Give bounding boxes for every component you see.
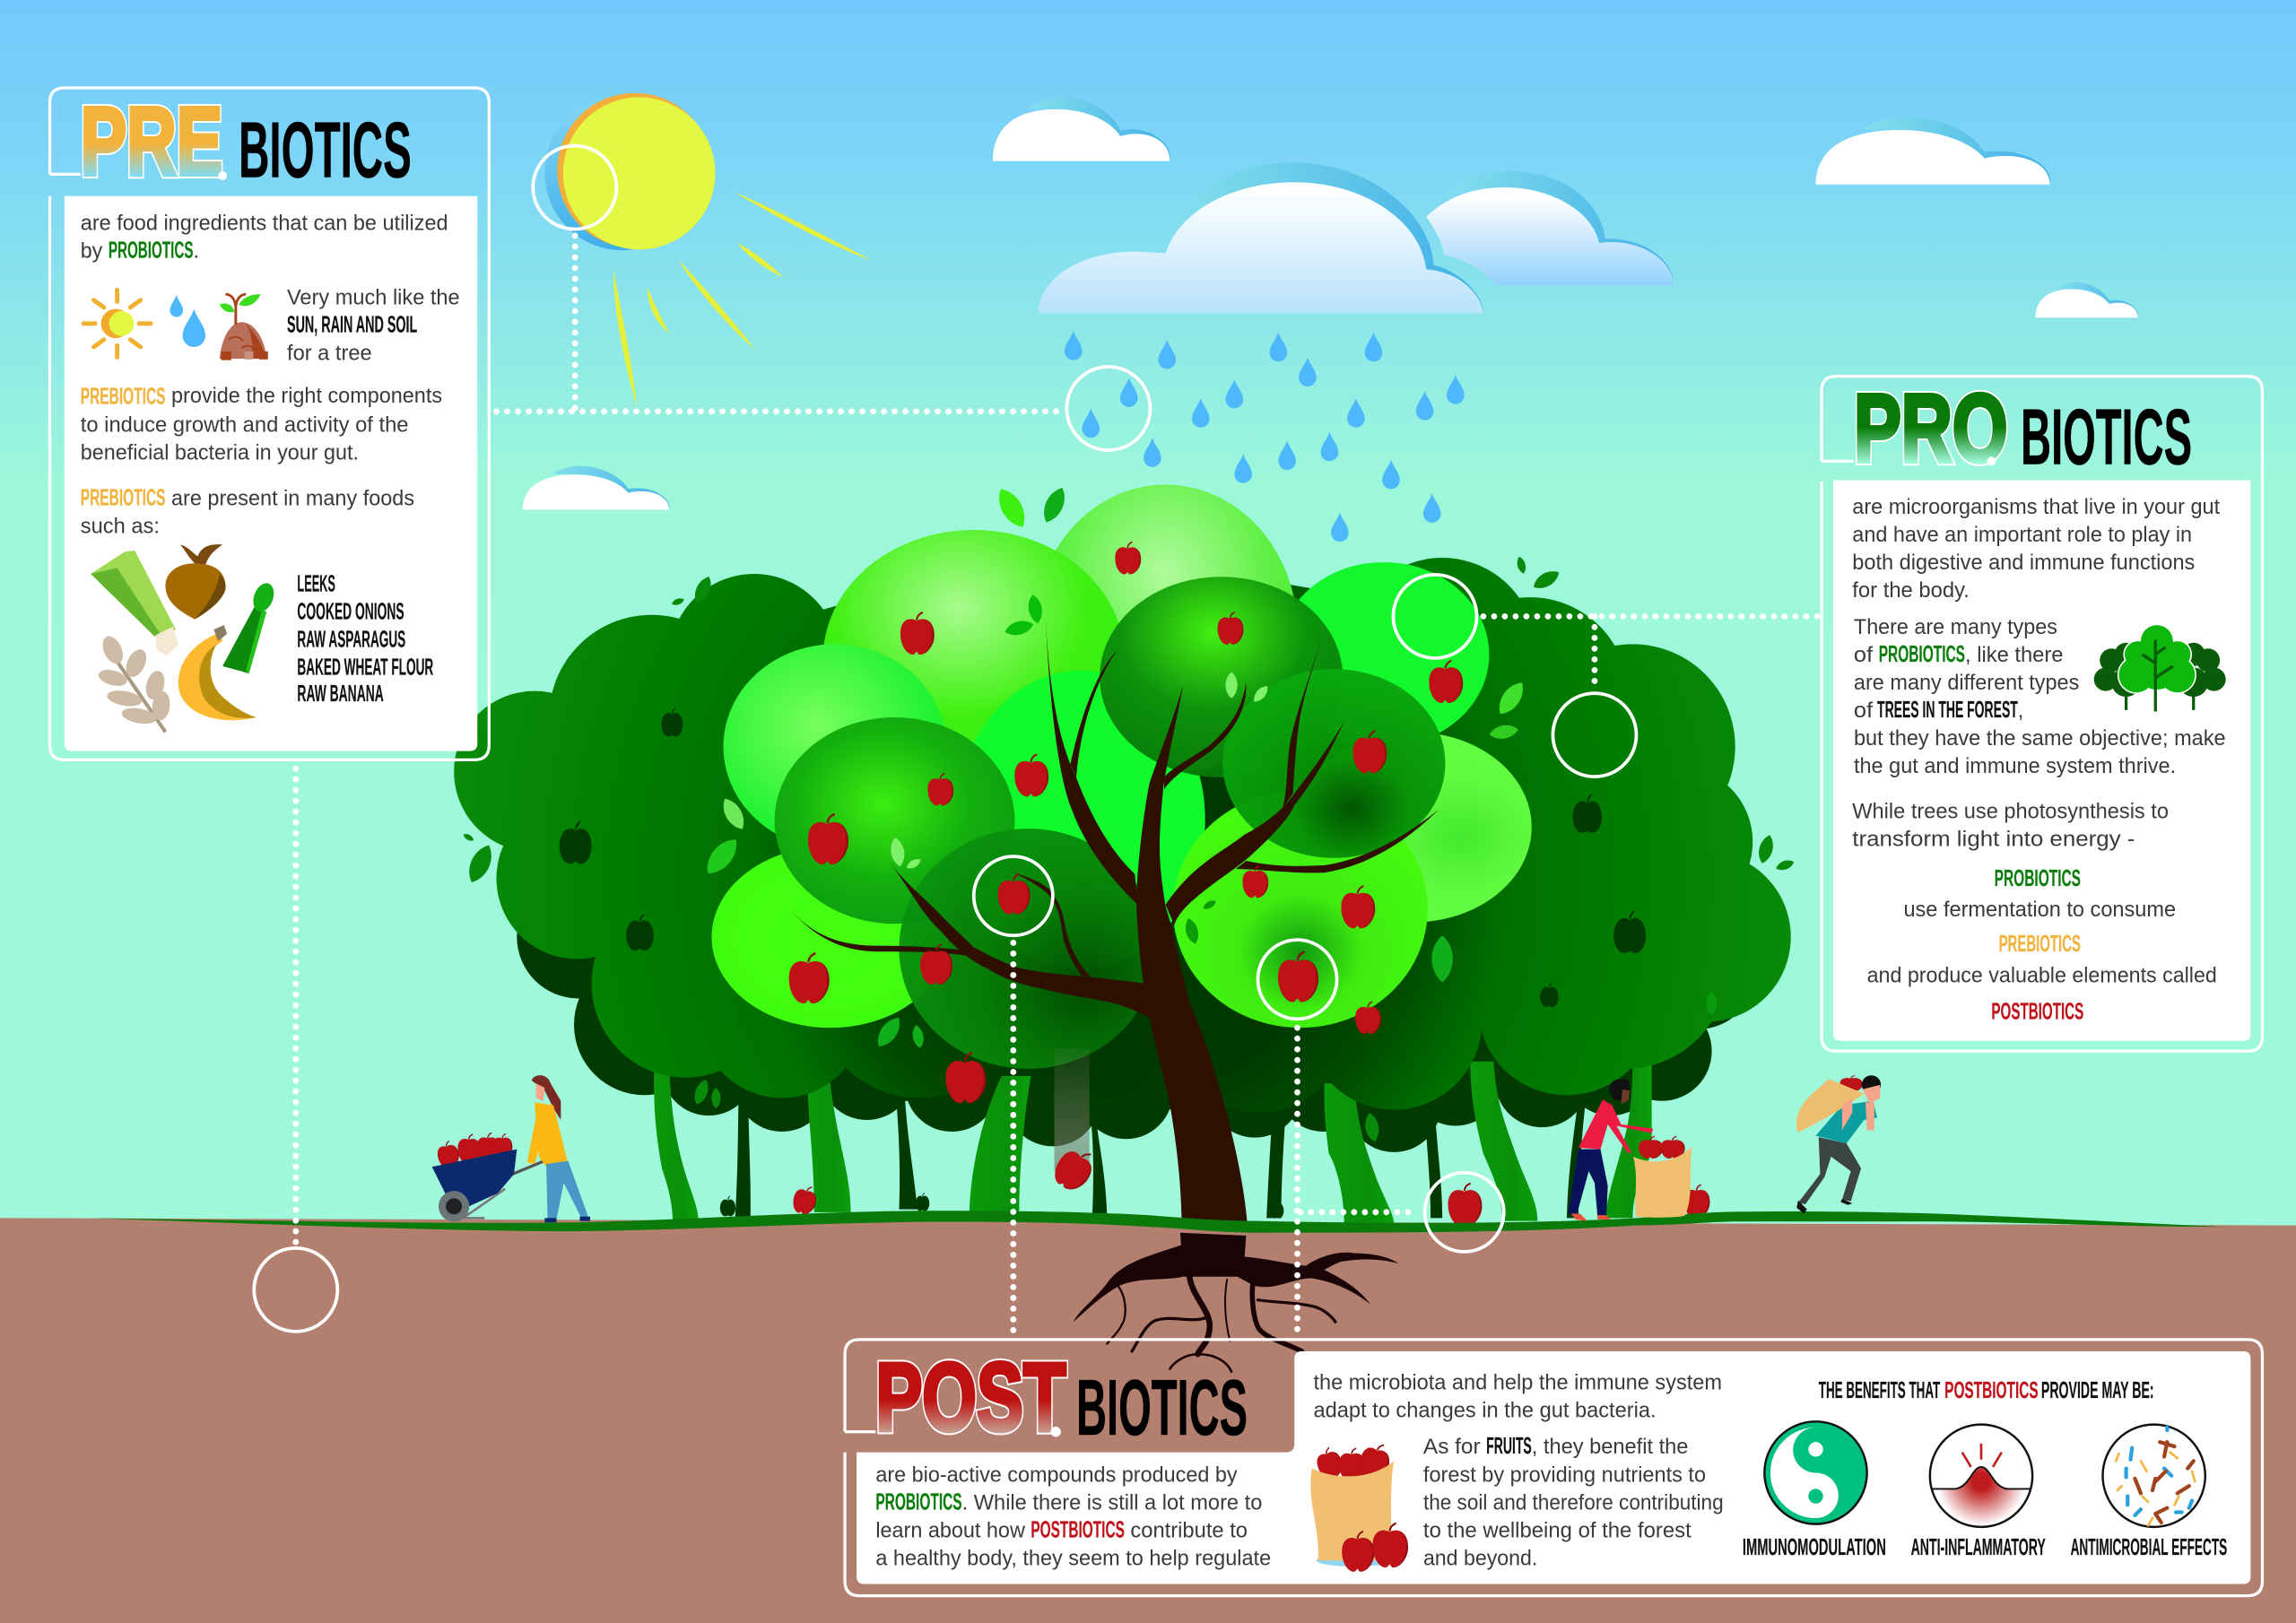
dotted connector lines xyxy=(296,236,1822,1338)
list: prebiotic foods xyxy=(297,570,433,707)
text: definition: are food ingredients that can be utilized xyxy=(81,212,448,235)
icon: wheat xyxy=(97,633,171,732)
icon: soil and sprout xyxy=(220,294,268,360)
text: prebiotics role: provide the right components xyxy=(171,385,442,408)
heading: POST BIOTICS: POST xyxy=(875,1342,1066,1451)
panel: postbiotics xyxy=(845,1340,2262,1596)
icon: trees xyxy=(2094,624,2226,711)
heading: PRO BIOTICS: PRO xyxy=(1854,373,2007,482)
text: types of probiotics: the gut and immune system thrive. xyxy=(1854,755,2176,778)
apples on the tree xyxy=(560,542,1709,1226)
text: definition: are bio-active compounds produced by xyxy=(875,1463,1238,1487)
text: photosynthesis comparison: PROBIOTICS xyxy=(1995,864,2081,891)
text: prebiotics role xyxy=(81,383,442,465)
text: definition: adapt to changes in the gut bacteria. xyxy=(1313,1399,1657,1422)
text: definition xyxy=(875,1371,1722,1570)
text: fruits: , they benefit the xyxy=(1532,1436,1688,1459)
text: photosynthesis comparison: transform light into energy - xyxy=(1852,829,2135,852)
list: prebiotic foods: BAKED WHEAT FLOUR xyxy=(297,654,433,681)
text: types of probiotics: are many different types xyxy=(1854,672,2079,695)
text: photosynthesis comparison xyxy=(1852,801,2217,1024)
text: types of probiotics: of xyxy=(1854,644,1874,667)
text: sun rain and soil: Very much like the xyxy=(287,287,460,310)
list: prebiotic foods: COOKED ONIONS xyxy=(297,598,404,625)
text: types of probiotics: of xyxy=(1854,699,1874,723)
text: foods intro: are present in many foods xyxy=(171,487,414,510)
panel: probiotics xyxy=(1822,373,2262,1051)
tree trunk and branches xyxy=(787,615,1439,1227)
icon: rain drops xyxy=(170,295,205,347)
icon: antimicrobial xyxy=(2102,1425,2205,1527)
text: photosynthesis comparison: use fermentation to consume xyxy=(1903,898,2176,922)
icon: banana xyxy=(178,625,257,720)
icon: asparagus xyxy=(222,580,277,673)
heading: PRE BIOTICS xyxy=(81,86,412,195)
text: definition: learn about how xyxy=(875,1519,1026,1542)
ground xyxy=(0,1218,2296,1623)
clouds xyxy=(523,97,2138,510)
text: types of probiotics xyxy=(1854,616,2226,778)
heading: POST BIOTICS: POST xyxy=(875,1342,1066,1451)
text: fruits xyxy=(1423,1432,1724,1570)
background forest canopy xyxy=(517,875,1754,1152)
text: fruits: the soil and therefore contributing xyxy=(1423,1491,1724,1515)
person with wheelbarrow xyxy=(432,1075,590,1222)
text: prebiotics role: to induce growth and activity of the xyxy=(81,414,409,438)
text: sun rain and soil: for a tree xyxy=(287,343,372,366)
text: definition: by xyxy=(81,239,102,263)
callout rings xyxy=(254,145,1636,1332)
text: definition: the microbiota and help the immune system xyxy=(1313,1371,1722,1394)
text: foods intro: PREBIOTICS xyxy=(81,483,165,510)
list: prebiotic foods: RAW ASPARAGUS xyxy=(297,626,405,653)
text: photosynthesis comparison: While trees use photosynthesis to xyxy=(1852,801,2169,824)
grass strip xyxy=(91,1211,2226,1233)
falling apple trail xyxy=(1055,1048,1090,1171)
panel: prebiotics xyxy=(50,86,489,759)
tree roots xyxy=(1074,1233,1398,1372)
text: photosynthesis comparison: POSTBIOTICS xyxy=(1991,997,2083,1024)
forest trunks xyxy=(654,1055,1652,1224)
heading: PRO BIOTICS xyxy=(1854,373,2192,482)
mid forest canopy xyxy=(454,558,1791,1113)
text: photosynthesis comparison: PREBIOTICS xyxy=(1999,930,2081,957)
main tree canopy blobs xyxy=(711,484,1532,1069)
text: types of probiotics: , like there xyxy=(1965,644,2063,667)
list: prebiotic foods: LEEKS xyxy=(297,570,335,597)
text: definition: are microorganisms that live in your gut xyxy=(1852,496,2221,519)
heading: benefits: PROVIDE MAY BE: xyxy=(2041,1376,2154,1403)
label: anti-inflammatory: ANTI-INFLAMMATORY xyxy=(1911,1533,2046,1560)
text: definition: for the body. xyxy=(1852,579,1970,603)
text: sun rain and soil: SUN, RAIN AND SOIL xyxy=(287,311,417,338)
text: definition: a healthy body, they seem to help regulate xyxy=(875,1547,1271,1570)
heading: PRO BIOTICS: PRO xyxy=(1854,373,2007,482)
rain drops xyxy=(1065,331,1465,542)
person carrying sack xyxy=(1796,1075,1881,1213)
text: foods intro xyxy=(81,483,414,538)
text: photosynthesis comparison: and produce valuable elements called xyxy=(1867,965,2217,988)
heading: PRE BIOTICS: PRE xyxy=(81,86,222,195)
icon: sun xyxy=(83,290,151,357)
text: fruits: and beyond. xyxy=(1423,1547,1537,1570)
text: prebiotics role: PREBIOTICS xyxy=(81,383,165,410)
icon: anti-inflammatory xyxy=(1930,1425,2032,1527)
list: prebiotic foods: RAW BANANA xyxy=(297,680,384,707)
label: immunomodulation: IMMUNOMODULATION xyxy=(1743,1533,1886,1560)
heading: POST BIOTICS: BIOTICS xyxy=(1076,1363,1248,1452)
text: foods intro: such as: xyxy=(81,515,160,538)
text: definition: and have an important role to play in xyxy=(1852,524,2192,547)
text: definition xyxy=(1852,496,2221,603)
heading: benefits: THE BENEFITS THAT xyxy=(1819,1376,1940,1403)
person filling sack xyxy=(1569,1079,1692,1221)
text: definition: both digestive and immune functions xyxy=(1852,551,2195,575)
text: types of probiotics: but they have the same objective; make xyxy=(1854,727,2226,751)
text: types of probiotics: TREES IN THE FOREST xyxy=(1877,696,2018,723)
heading: benefits: POSTBIOTICS xyxy=(1944,1376,2039,1403)
text: definition: . xyxy=(194,239,199,263)
text: definition: contribute to xyxy=(1130,1519,1248,1542)
text: definition: PROBIOTICS xyxy=(109,236,194,263)
text: fruits: FRUITS xyxy=(1486,1432,1532,1459)
text: types of probiotics: There are many types xyxy=(1854,616,2057,639)
text: definition: POSTBIOTICS xyxy=(1031,1515,1125,1542)
icon: leek xyxy=(91,551,178,655)
sun xyxy=(544,93,872,408)
text: definition: PROBIOTICS xyxy=(875,1488,962,1515)
text: fruits: forest by providing nutrients to xyxy=(1423,1463,1706,1487)
icon: onion xyxy=(165,544,226,620)
text: definition: . While there is still a lot more to xyxy=(962,1491,1262,1515)
text: sun rain and soil xyxy=(287,287,460,366)
text: prebiotics role: beneficial bacteria in your gut. xyxy=(81,442,359,465)
heading: PRE BIOTICS: BIOTICS xyxy=(239,106,412,195)
text: types of probiotics: , xyxy=(2018,699,2023,723)
leaves xyxy=(462,484,1796,1143)
icon: bag of fruit xyxy=(1310,1440,1408,1572)
heading: PRE BIOTICS: PRE xyxy=(81,86,222,195)
text: fruits: As for xyxy=(1423,1436,1481,1459)
icon: immunomodulation yin yang xyxy=(1764,1421,1867,1524)
text: types of probiotics: PROBIOTICS xyxy=(1879,640,1965,667)
text: fruits: to the wellbeing of the forest xyxy=(1423,1519,1692,1542)
text: definition xyxy=(81,212,448,263)
